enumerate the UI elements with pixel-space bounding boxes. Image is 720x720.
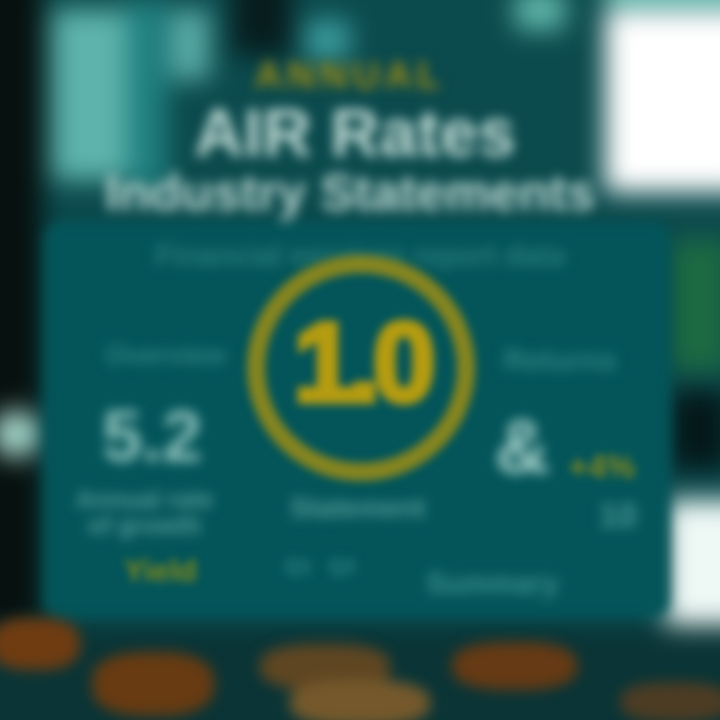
- coin 3: [260, 644, 390, 690]
- left column label: Overview: [105, 340, 226, 370]
- main heading: AIR Rates: [194, 95, 516, 171]
- left description: [74, 486, 216, 543]
- right big symbol: &: [495, 405, 550, 490]
- title block: [98, 55, 600, 228]
- ring metric: [240, 249, 481, 488]
- bottom right text: Summary: [426, 568, 559, 600]
- coin 1: [0, 618, 80, 670]
- right gold value: +4%: [569, 448, 635, 485]
- coin 2: [92, 652, 214, 716]
- right column label: Returns: [503, 344, 617, 377]
- sub heading: Industry Statements: [105, 164, 595, 221]
- coin 5: [452, 642, 577, 690]
- coin 6: [620, 682, 720, 720]
- left bright blob: [0, 410, 40, 458]
- center description: Statement: [290, 492, 425, 523]
- right small value: 10: [599, 497, 637, 535]
- big number: 1.0: [294, 300, 428, 425]
- bright top right: [605, 10, 720, 192]
- card header text: Financial services report data: [155, 240, 565, 272]
- gold ring: [240, 249, 481, 488]
- left big number: 5.2: [102, 397, 202, 477]
- left dark column: [0, 0, 42, 720]
- left description: Annual rate: [76, 486, 213, 514]
- bottom strip: [0, 625, 720, 720]
- right lower dark and green: [670, 240, 720, 370]
- coin 4: [290, 680, 430, 720]
- panel: main card: [44, 222, 670, 618]
- window panels top: [52, 10, 127, 180]
- coins row: [0, 609, 720, 720]
- eyebrow heading: ANNUAL: [255, 55, 445, 97]
- bottom center labels: Q1 Q2: [285, 556, 355, 578]
- left gold note: Yield: [124, 553, 197, 588]
- left description: of growth: [88, 512, 201, 540]
